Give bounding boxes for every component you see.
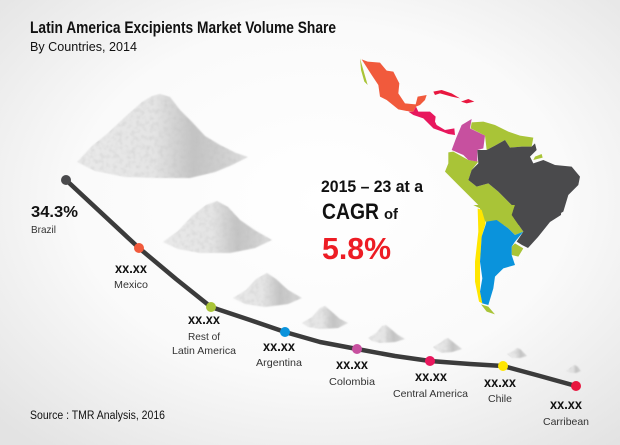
- pile: Mexico: [163, 201, 272, 253]
- label: Brazil: Brazil: [31, 224, 56, 236]
- pile: Colombia: [368, 325, 405, 343]
- label: Central America: Central America: [393, 388, 468, 400]
- pile: Central America: [433, 338, 462, 353]
- label: Argentina: xx.xx: [263, 339, 295, 354]
- Mexico and Caribbean region: [360, 58, 474, 135]
- Brazil north: [468, 140, 580, 225]
- Argentina: [480, 220, 523, 305]
- title: Latin America Excipients Market Volume Share: [30, 18, 336, 37]
- subtitle: By Countries, 2014: [30, 39, 137, 54]
- label: Mexico: xx.xx: [115, 261, 147, 276]
- label: Rest of Latin America: Latin America: [172, 345, 236, 357]
- label: Central America: xx.xx: [415, 369, 447, 384]
- label: Chile: Chile: [488, 393, 512, 405]
- Chile: [475, 208, 486, 303]
- pile: Rest of Latin America: [233, 273, 302, 307]
- label: Carribean: xx.xx: [550, 397, 582, 412]
- data points: [61, 175, 581, 391]
- Mexico: [362, 59, 427, 112]
- label: Carribean: [543, 397, 589, 428]
- Venezuela and Guianas: [471, 122, 533, 150]
- pile: Carribean: [566, 365, 581, 373]
- map of Latin America: [360, 58, 580, 314]
- Tierra del Fuego: [481, 304, 495, 314]
- Colombia: [452, 119, 485, 162]
- Baja California: [360, 58, 368, 85]
- southern South America: [473, 205, 562, 314]
- Central America: [408, 107, 455, 135]
- declining share line: [66, 180, 576, 386]
- CAGR callout: of: [384, 206, 399, 223]
- Bolivia and Paraguay: [473, 205, 523, 235]
- CAGR callout: [321, 178, 424, 266]
- CAGR callout: 2015 – 23 at a: [321, 178, 424, 196]
- pile: Brazil: [77, 94, 248, 178]
- label: Carribean: Carribean: [543, 416, 589, 428]
- label: Brazil: [31, 204, 78, 236]
- French Guiana: [533, 154, 543, 160]
- label: Central America: [393, 369, 468, 400]
- label: Mexico: [114, 261, 148, 291]
- label: Mexico: Mexico: [114, 279, 148, 291]
- label: Chile: xx.xx: [484, 375, 516, 390]
- CAGR callout: CAGR: [322, 199, 379, 224]
- label: Rest of Latin America: xx.xx: [188, 312, 220, 327]
- CAGR callout: 5.8%: [322, 231, 391, 266]
- pile: Chile: [507, 348, 527, 358]
- label: Colombia: [329, 357, 375, 388]
- label: Argentina: [256, 339, 302, 369]
- powder piles: [77, 94, 581, 373]
- label: Rest of Latin America: [172, 312, 236, 357]
- label: Brazil: 34.3%: [31, 204, 78, 221]
- label: Argentina: Argentina: [256, 357, 302, 369]
- source note: Source : TMR Analysis, 2016: [30, 410, 165, 422]
- label: Colombia: xx.xx: [336, 357, 368, 372]
- Caribbean islands: [433, 90, 474, 103]
- label: Rest of Latin America: Rest of: [188, 331, 220, 343]
- label: Chile: [484, 375, 516, 405]
- Andean countries: [445, 152, 515, 225]
- northern South America: [445, 119, 580, 225]
- pile: Argentina: [302, 306, 348, 329]
- Brazil south: [512, 205, 562, 248]
- label: Colombia: Colombia: [329, 376, 375, 388]
- Uruguay: [512, 243, 523, 257]
